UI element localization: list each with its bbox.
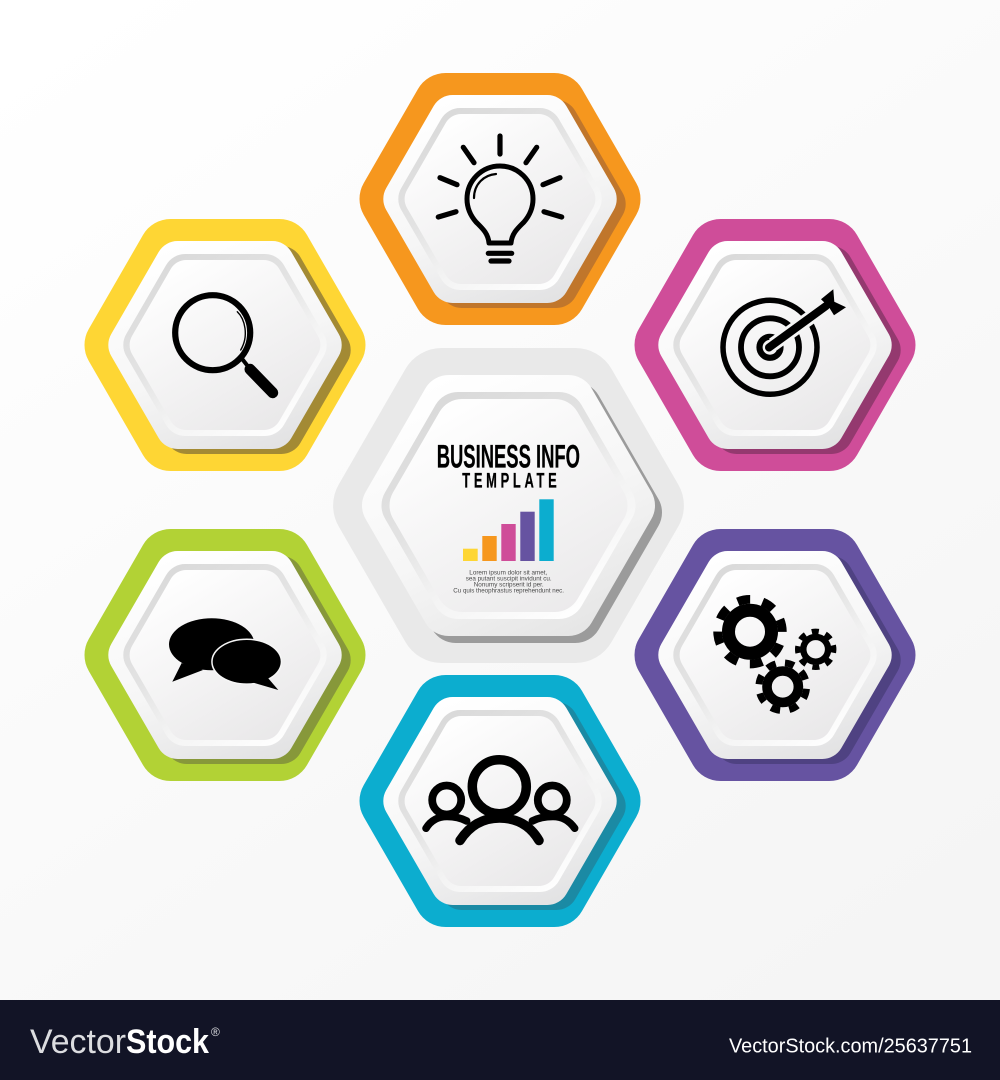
panel: central hexagon	[375, 390, 642, 621]
panel: pink target hexagon	[666, 251, 884, 439]
icon: lightbulb	[438, 136, 562, 261]
image id text: VectorStock.com/25637751	[729, 1036, 972, 1058]
text block: lorem ipsum: Cu quis theophrastus reprehendunt nec.	[453, 588, 564, 595]
panel: green chat hexagon	[116, 561, 334, 749]
logo: VectorStock	[30, 1023, 220, 1061]
panel: blue team hexagon	[392, 707, 608, 895]
icon: gears	[708, 589, 837, 713]
panel: orange lightbulb hexagon	[392, 105, 608, 293]
footer bar	[0, 1000, 1000, 1080]
icon: target with arrow	[723, 289, 846, 394]
text block: lorem ipsum	[453, 570, 564, 595]
logo: VectorStock: Vector	[30, 1023, 126, 1061]
text block: lorem ipsum: Lorem ipsum dolor sit amet,	[469, 570, 547, 576]
icon: team of people	[426, 760, 575, 840]
text block: lorem ipsum: Nonumy scripserit id per.	[474, 582, 544, 589]
panel: purple gears hexagon	[666, 561, 884, 749]
logo: VectorStock: ®	[211, 1025, 220, 1039]
subtitle: template: TEMPLATE	[462, 468, 557, 493]
logo: VectorStock: Stock	[126, 1023, 209, 1061]
icon: magnifying glass	[175, 295, 273, 393]
panel: yellow magnifier hexagon	[116, 251, 334, 439]
title: business info: BUSINESS INFO	[437, 438, 580, 474]
text block: lorem ipsum: sea putant suscipit invidunt cu.	[466, 576, 552, 583]
icon: speech bubbles	[169, 618, 281, 690]
bar chart	[463, 499, 554, 561]
